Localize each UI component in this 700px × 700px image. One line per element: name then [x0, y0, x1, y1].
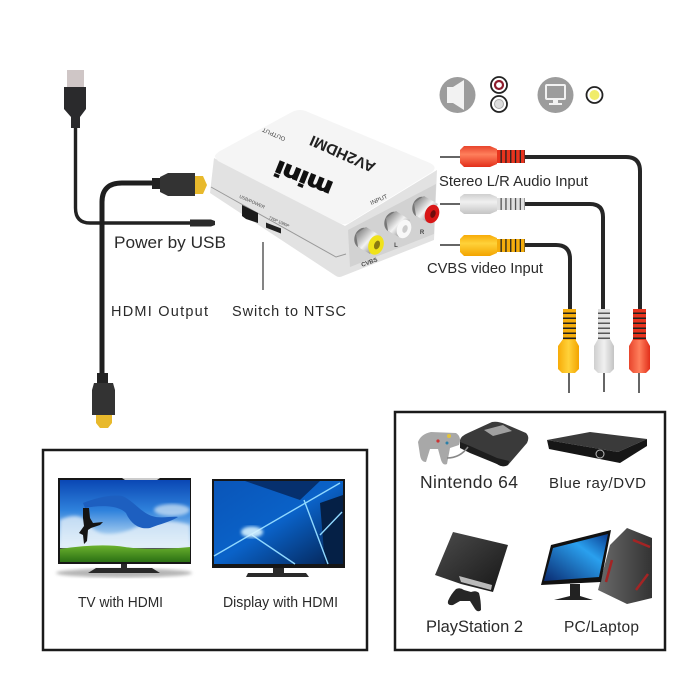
ps console slot: [459, 576, 492, 590]
panel frame: [43, 450, 367, 650]
TV with HDMI: [56, 478, 192, 611]
body: [558, 339, 579, 373]
ribs: [497, 198, 525, 210]
Blue ray DVD: [547, 432, 647, 492]
display light flare: [241, 526, 263, 538]
yellow jack ring: [366, 233, 386, 257]
display dark facet right: [320, 495, 343, 564]
PC Laptop: [541, 528, 652, 636]
pin: [440, 203, 462, 205]
tv scarf: [83, 495, 178, 528]
rib color: [563, 309, 576, 340]
ribs: [563, 309, 576, 340]
device text mini: mini: [271, 156, 336, 201]
resolution switch: [267, 224, 280, 232]
ribs: [497, 239, 525, 252]
ps console: [435, 532, 508, 592]
pin: [568, 372, 570, 393]
body: [629, 339, 650, 373]
jack panel: [348, 184, 436, 267]
tv upper right cloud: [154, 504, 190, 516]
yellow jack barrel base: [351, 225, 375, 251]
white jack ring: [394, 218, 414, 240]
monitor disc: [538, 77, 574, 113]
pc tower: [598, 528, 652, 604]
tv screen: [60, 480, 190, 562]
white jack hole: [401, 224, 409, 234]
device text OUTPUT: OUTPUT: [261, 126, 287, 141]
device text AV2HDMI: AV2HDMI: [307, 131, 378, 175]
label: stereo audio input: Stereo L/R Audio Input: [439, 174, 588, 190]
barrel power connector: [190, 220, 215, 226]
red jack barrel: [414, 196, 438, 222]
tv top highlight: [122, 478, 160, 480]
white cable line: [524, 204, 603, 310]
rib color: [497, 150, 525, 163]
tv stand: [88, 564, 160, 573]
yellow cable line: [524, 245, 570, 310]
white jack barrel base: [381, 209, 405, 235]
icon: monitor: [538, 77, 574, 113]
body: [460, 194, 497, 214]
n64 cable: [447, 447, 468, 458]
pin: [440, 244, 462, 246]
tv grass: [60, 545, 190, 562]
RCA cables: [440, 146, 650, 393]
Nintendo 64: [418, 422, 528, 492]
display with HDMI: [212, 479, 345, 611]
usb port: [242, 205, 258, 223]
box seam line: [211, 187, 346, 257]
dvd dial: [596, 450, 604, 458]
top hdmi plug body: [160, 173, 195, 196]
display frame: [212, 479, 345, 568]
yellow socket core: [590, 90, 600, 100]
HDMI cable: [92, 173, 207, 428]
label: PC Laptop: PC/Laptop: [564, 619, 639, 636]
body: [594, 339, 614, 373]
white socket core: [494, 100, 504, 108]
n64 controller button red: [436, 439, 440, 443]
display stand: [246, 568, 309, 577]
body: [460, 146, 497, 167]
rib color: [497, 198, 525, 210]
bottom red plug: [629, 309, 650, 393]
red socket core: [495, 81, 503, 89]
tv dancer: [79, 508, 103, 544]
bottom hdmi plug body: [92, 383, 115, 415]
white jack barrel: [386, 211, 410, 237]
icon: white RCA socket: [491, 96, 507, 112]
red jack: [409, 194, 442, 225]
display light beam: [214, 483, 342, 564]
rib color: [633, 309, 646, 340]
speaker glyph: [447, 80, 464, 110]
red cable line: [524, 157, 640, 310]
label: switch to NTSC: Switch to NTSC: [232, 304, 346, 320]
tv sky: [60, 480, 190, 548]
red jack barrel base: [409, 194, 433, 220]
label: Nintendo 64: Nintendo 64: [420, 472, 518, 492]
panel: input devices: [395, 412, 665, 650]
yellow socket ring: [586, 87, 602, 103]
n64 controller button blue: [446, 442, 448, 444]
PlayStation 2: [426, 532, 523, 636]
device text 720P 1080P: 720P 1080P: [268, 215, 291, 228]
icon: yellow RCA socket: [586, 87, 602, 103]
pc monitor stand: [554, 584, 593, 600]
n64 controller button yellow: [447, 434, 451, 438]
panel: output displays: [43, 450, 367, 650]
pin: [440, 156, 462, 158]
NTSC switch pointer line: [262, 242, 264, 290]
n64 slot: [484, 425, 512, 436]
label: HDMI output: HDMI Output: [111, 304, 208, 320]
panel frame: [395, 412, 665, 650]
monitor screen: [546, 85, 565, 99]
converter box: [210, 110, 442, 277]
dvd front: [547, 439, 647, 463]
icon: red RCA socket: [491, 77, 507, 93]
red jack ring: [422, 203, 442, 225]
top red plug: [440, 146, 525, 167]
white jack: [381, 209, 414, 240]
usb plug metal tip: [67, 70, 84, 88]
hdmi cable line: [102, 183, 155, 375]
device text USB power: USB/POWER: [239, 194, 266, 210]
pc tower accents: [606, 540, 650, 590]
box top face: [215, 110, 435, 224]
ribs: [497, 150, 525, 163]
box body sides: [210, 158, 437, 277]
pin: [638, 372, 640, 393]
rib color: [598, 309, 610, 340]
label: PlayStation 2: PlayStation 2: [426, 618, 523, 636]
jack label R: R: [420, 230, 425, 236]
speaker disc: [440, 77, 476, 113]
bottom white plug: [594, 309, 614, 392]
label: power by USB: Power by USB: [114, 234, 226, 252]
rib color: [497, 239, 525, 252]
dvd top: [547, 432, 647, 452]
monitor stand: [549, 100, 562, 105]
bottom yellow plug: [558, 309, 579, 393]
jack label CVBS: CVBS: [361, 257, 379, 269]
red jack hole: [429, 209, 437, 219]
pc monitor frame: [541, 530, 611, 585]
white socket ring: [491, 96, 507, 112]
tv frame: [58, 478, 191, 564]
usb plug body: [64, 87, 86, 128]
n64 console front: [460, 442, 509, 466]
display screen: [214, 481, 343, 564]
ribs: [633, 309, 646, 340]
yellow jack barrel: [356, 227, 381, 254]
label: CVBS video input: CVBS video Input: [427, 261, 543, 277]
n64 console: [460, 422, 528, 466]
red socket ring: [491, 77, 507, 93]
yellow jack hole: [373, 240, 381, 250]
tv shadow: [56, 568, 192, 578]
top hdmi strain relief: [152, 178, 161, 189]
body: [460, 235, 497, 256]
tv clouds: [60, 516, 190, 548]
label: blue ray DVD: Blue ray/DVD: [549, 475, 646, 492]
label: display with HDMI: Display with HDMI: [223, 595, 338, 611]
ribs: [598, 309, 610, 340]
usb cable line: [76, 125, 192, 223]
jack label L: L: [394, 243, 398, 249]
top hdmi gold tip: [195, 176, 207, 194]
icon: speaker: [440, 77, 476, 113]
pin: [603, 372, 605, 392]
top yellow plug: [440, 235, 525, 256]
ps controller: [448, 588, 481, 611]
n64 controller: [418, 432, 460, 464]
label: TV with HDMI: TV with HDMI: [78, 595, 163, 611]
display dark facet: [245, 481, 320, 500]
device text INPUT: INPUT: [370, 194, 389, 207]
bottom hdmi gold tip: [96, 415, 112, 428]
pc monitor screen: [544, 534, 608, 581]
USB power cable: [64, 70, 215, 226]
yellow jack: [351, 225, 386, 257]
top white plug: [440, 194, 525, 214]
bottom hdmi strain relief: [97, 373, 108, 384]
